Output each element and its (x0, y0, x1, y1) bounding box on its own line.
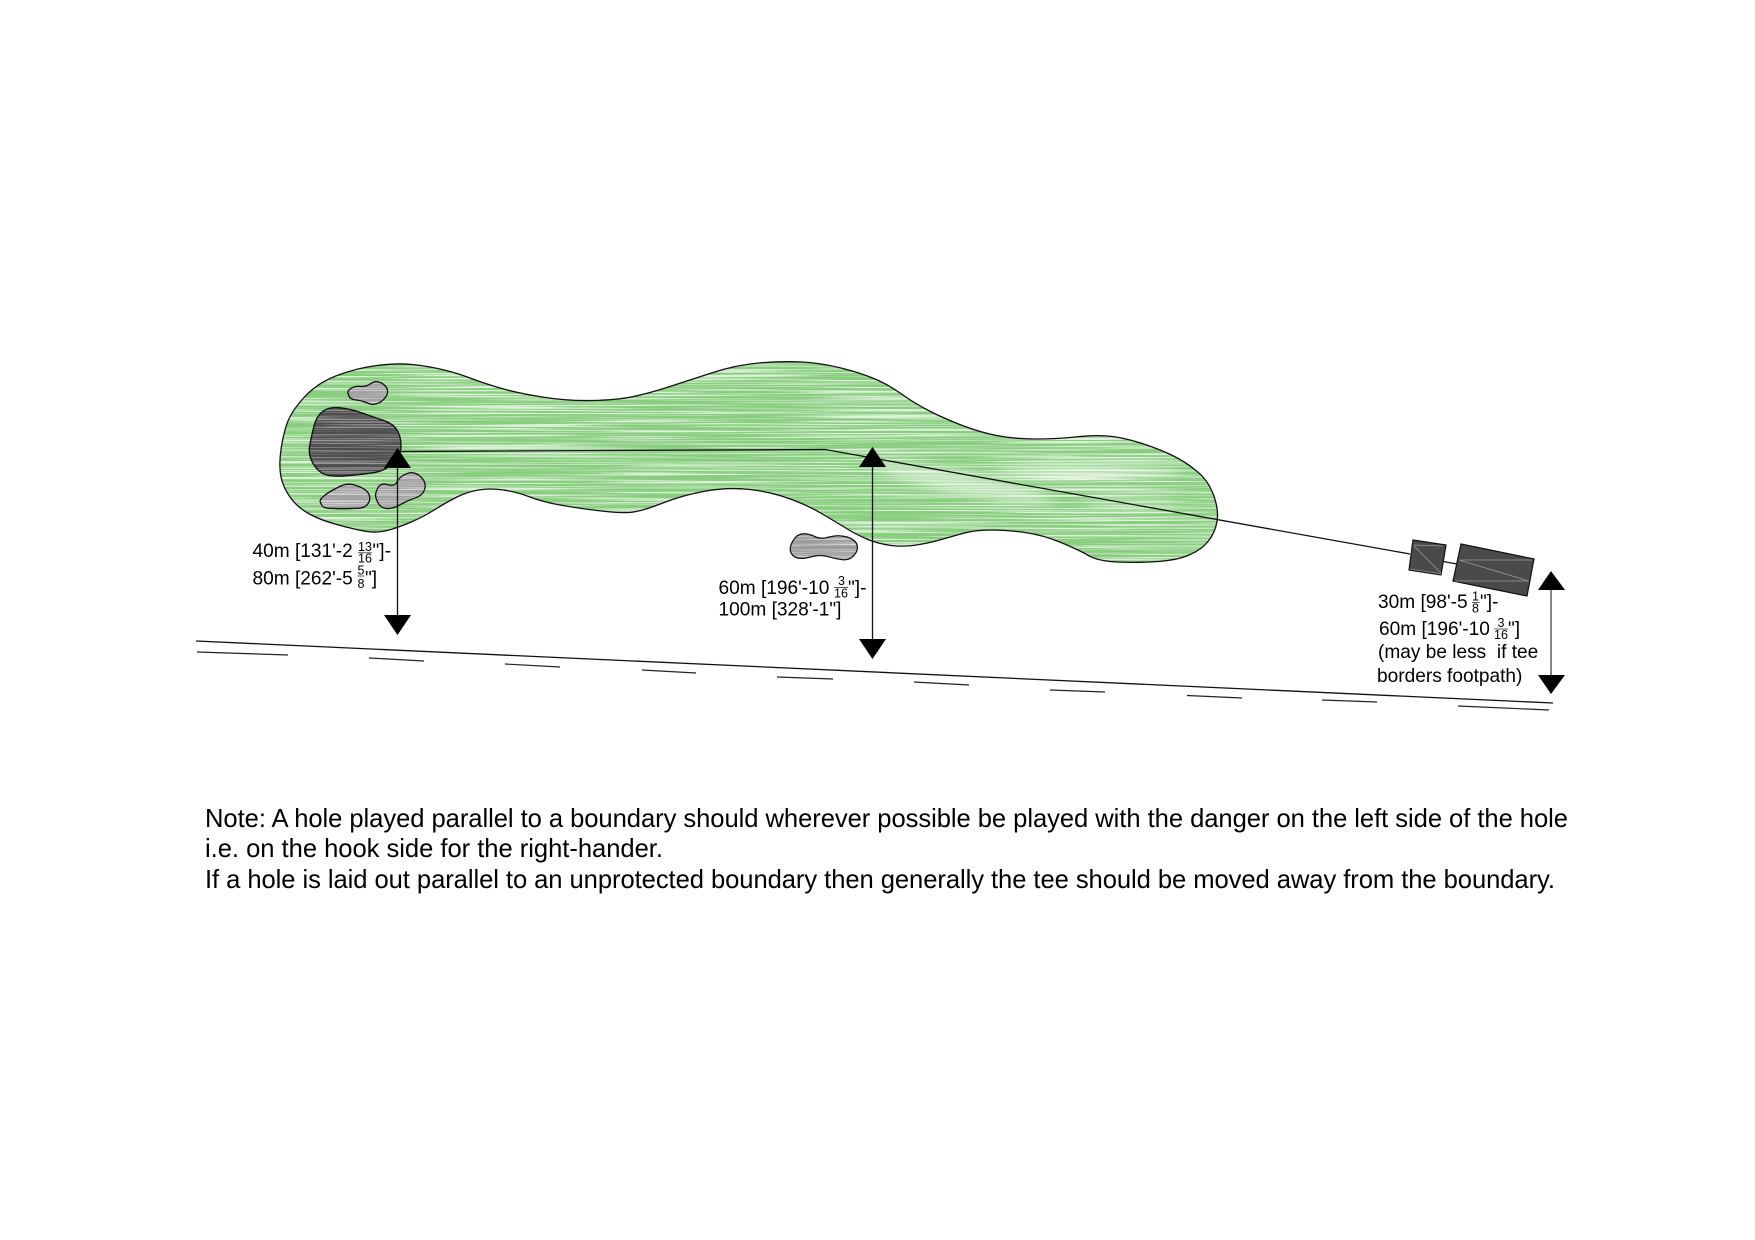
label: green distance: 13 (358, 540, 372, 554)
label: tee distance: 60m [196'-10 (1379, 619, 1490, 640)
label: landing zone distance: 60m [196'-10 (718, 578, 829, 599)
label: green distance: 5 (358, 564, 364, 578)
note text: If a hole is laid out parallel to an unprotected boundary then generally the tee should be moved away from the boundary. (205, 866, 1555, 894)
note text: i.e. on the hook side for the right-hander. (205, 835, 663, 863)
note text: Note: A hole played parallel to a boundary should wherever possible be played with the danger on the left side of the hole (205, 805, 1568, 833)
label: green distance: "]- (372, 541, 391, 562)
bunker: top (347, 381, 388, 405)
connector between tees (1443, 562, 1457, 564)
bunker: fairway side (790, 533, 858, 560)
arrow: tee to boundary (1538, 571, 1565, 694)
label: landing zone distance: "]- (848, 578, 866, 599)
tee: front (1409, 540, 1446, 575)
label: green distance (252, 540, 391, 591)
label: green distance: 8 (358, 577, 364, 591)
note text (205, 805, 1568, 894)
label: tee distance: 3 (1498, 616, 1504, 630)
label: tee distance (1377, 590, 1538, 687)
bunker: lower right (374, 472, 426, 510)
tee: back (1453, 544, 1534, 596)
label: green distance: 16 (358, 552, 372, 566)
arrow: landing zone to boundary (859, 447, 886, 659)
label: green distance: 80m [262'-5 (252, 568, 353, 590)
label: tee distance: borders footpath) (1377, 666, 1522, 687)
label: landing zone distance: 3 (838, 574, 845, 588)
bunker: lower left (320, 484, 370, 510)
label: tee distance: "] (1508, 619, 1520, 640)
green (308, 406, 402, 477)
label: landing zone distance (718, 574, 866, 620)
label: tee distance: "]- (1480, 592, 1498, 613)
label: tee distance: 16 (1494, 628, 1508, 642)
label: green distance: 40m [131'-2 (252, 541, 353, 562)
arrow: green to boundary (384, 448, 411, 635)
label: landing zone distance: 16 (834, 586, 848, 600)
centre line of play (400, 450, 1410, 554)
label: tee distance: 1 (1472, 590, 1479, 604)
label: tee distance: (may be less if tee (1378, 642, 1538, 663)
label: tee distance: 30m [98'-5 (1378, 592, 1468, 613)
label: green distance: "] (365, 568, 377, 590)
label: tee distance: 8 (1472, 602, 1479, 616)
boundary line (196, 641, 1553, 710)
fairway (270, 355, 1230, 570)
label: landing zone distance: 100m [328'-1"] (718, 600, 841, 620)
